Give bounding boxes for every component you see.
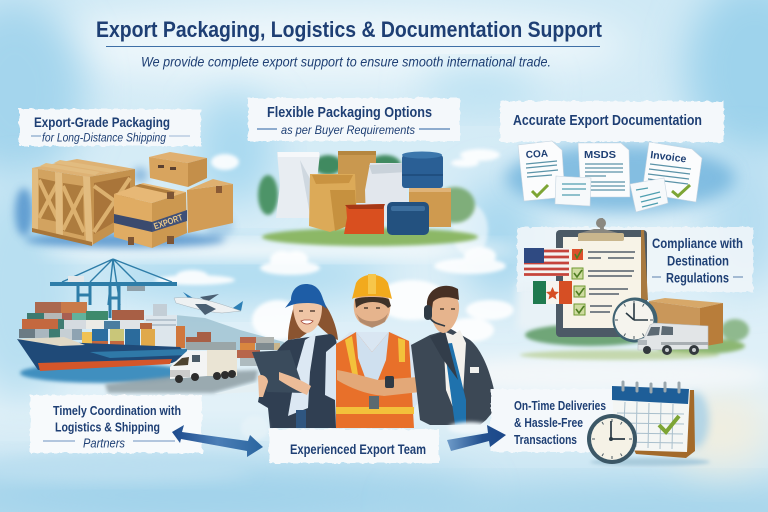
icon: kraft paper bag back	[338, 151, 376, 203]
icon: cardboard box	[409, 188, 451, 227]
icon: small note right	[630, 178, 668, 212]
icon: grass	[520, 319, 749, 360]
label: accurate export documentation: Accurate Export Documentation	[513, 113, 702, 129]
icon: invoice document: Invoice	[650, 149, 687, 165]
icon: MSDS document: MSDS	[584, 150, 616, 161]
icon: blue paint wash	[15, 167, 234, 248]
icon: cardboard box	[649, 298, 723, 347]
icon: semi truck	[170, 350, 237, 383]
icon: port crane	[50, 259, 177, 318]
text: compliance: Regulations	[666, 270, 729, 286]
panel: compliance with destination regulations	[517, 218, 753, 360]
icon: red bag	[344, 204, 385, 234]
icon: ship superstructure	[144, 304, 185, 348]
icon: manager with headset	[411, 286, 497, 425]
icon: cargo plane	[174, 292, 243, 315]
icon: compliance backing wash	[517, 227, 753, 330]
icon: blue jerrycan	[387, 202, 429, 235]
icon: port containers	[186, 332, 280, 366]
icon: delivery van	[638, 323, 708, 355]
icon: calendar with check	[590, 382, 710, 466]
icon: COA document	[518, 141, 565, 201]
icon: blue drum	[402, 152, 443, 188]
label: on-time deliveries: & Hassle-Free	[514, 416, 583, 430]
arrow: double-headed coordination arrow	[172, 425, 263, 457]
panel: flexible packaging options	[248, 98, 478, 246]
icon: blue wash behind documents	[505, 144, 735, 212]
icon: clipboard checklist	[556, 218, 648, 337]
icon: second flag	[533, 281, 572, 304]
icon: small note left	[555, 176, 591, 206]
icon: COA document: COA	[525, 148, 548, 161]
label: on-time deliveries: On-Time Deliveries	[514, 399, 606, 413]
text: compliance	[652, 236, 743, 286]
icon: invoice document	[642, 142, 702, 202]
panel: team illustration	[241, 274, 497, 440]
label: timely coordination: Timely Coordination with	[53, 403, 181, 418]
icon: white paint fade under team	[241, 416, 492, 440]
icon: stacked cardboard boxes: EXPORT	[152, 212, 184, 231]
arrow: team to deliveries	[447, 425, 506, 451]
label: flexible packaging: as per Buyer Requirements	[281, 123, 415, 137]
icon: second white sack	[365, 163, 407, 222]
label: experienced export team: Experienced Export Team	[290, 442, 426, 457]
label: timely coordination: Partners	[83, 436, 125, 450]
label: export-grade packaging: for Long-Distance Shipping	[42, 132, 167, 144]
icon: MSDS document	[578, 143, 630, 197]
icon: hill backdrop	[175, 315, 284, 350]
icon: clock	[612, 298, 658, 342]
panel: accurate export documentation	[500, 101, 735, 212]
label: on-time deliveries	[491, 389, 617, 452]
label: timely coordination: Logistics & Shipping	[55, 420, 160, 434]
subtitle: We provide complete export support to ensure smooth international trade.	[141, 54, 551, 70]
panel: shipping and logistics scene	[17, 259, 284, 394]
icon: sea and quay	[20, 363, 258, 394]
clouds	[155, 149, 514, 342]
icon: engineer with hard hat and vest	[325, 274, 426, 428]
label: export-grade packaging: Export-Grade Packaging	[34, 114, 170, 130]
icon: clock	[587, 414, 637, 464]
label: accurate export documentation	[500, 101, 724, 142]
label: export-grade packaging	[19, 109, 201, 146]
icon: green foliage backdrop	[258, 155, 478, 246]
icon: woman with clipboard	[252, 284, 338, 428]
label: flexible packaging	[248, 98, 460, 141]
text: compliance: Destination	[667, 254, 729, 268]
panel: export-grade packaging	[15, 109, 234, 248]
icon: stacked cardboard boxes	[114, 152, 233, 248]
title: Export Packaging, Logistics & Documentation Support	[96, 17, 603, 42]
label: on-time deliveries: Transactions	[514, 433, 577, 447]
label: timely coordination	[30, 395, 202, 453]
icon: stacked ship containers	[19, 302, 155, 346]
icon: container ship hull	[17, 337, 187, 371]
icon: wooden crate	[32, 159, 135, 246]
icon: US flag	[524, 248, 569, 276]
icon: kraft paper bag front	[309, 174, 357, 232]
label: flexible packaging: Flexible Packaging Options	[267, 104, 432, 121]
icon: white sack	[276, 152, 320, 218]
label: experienced export team	[269, 429, 439, 463]
text: compliance: Compliance with	[652, 236, 743, 251]
